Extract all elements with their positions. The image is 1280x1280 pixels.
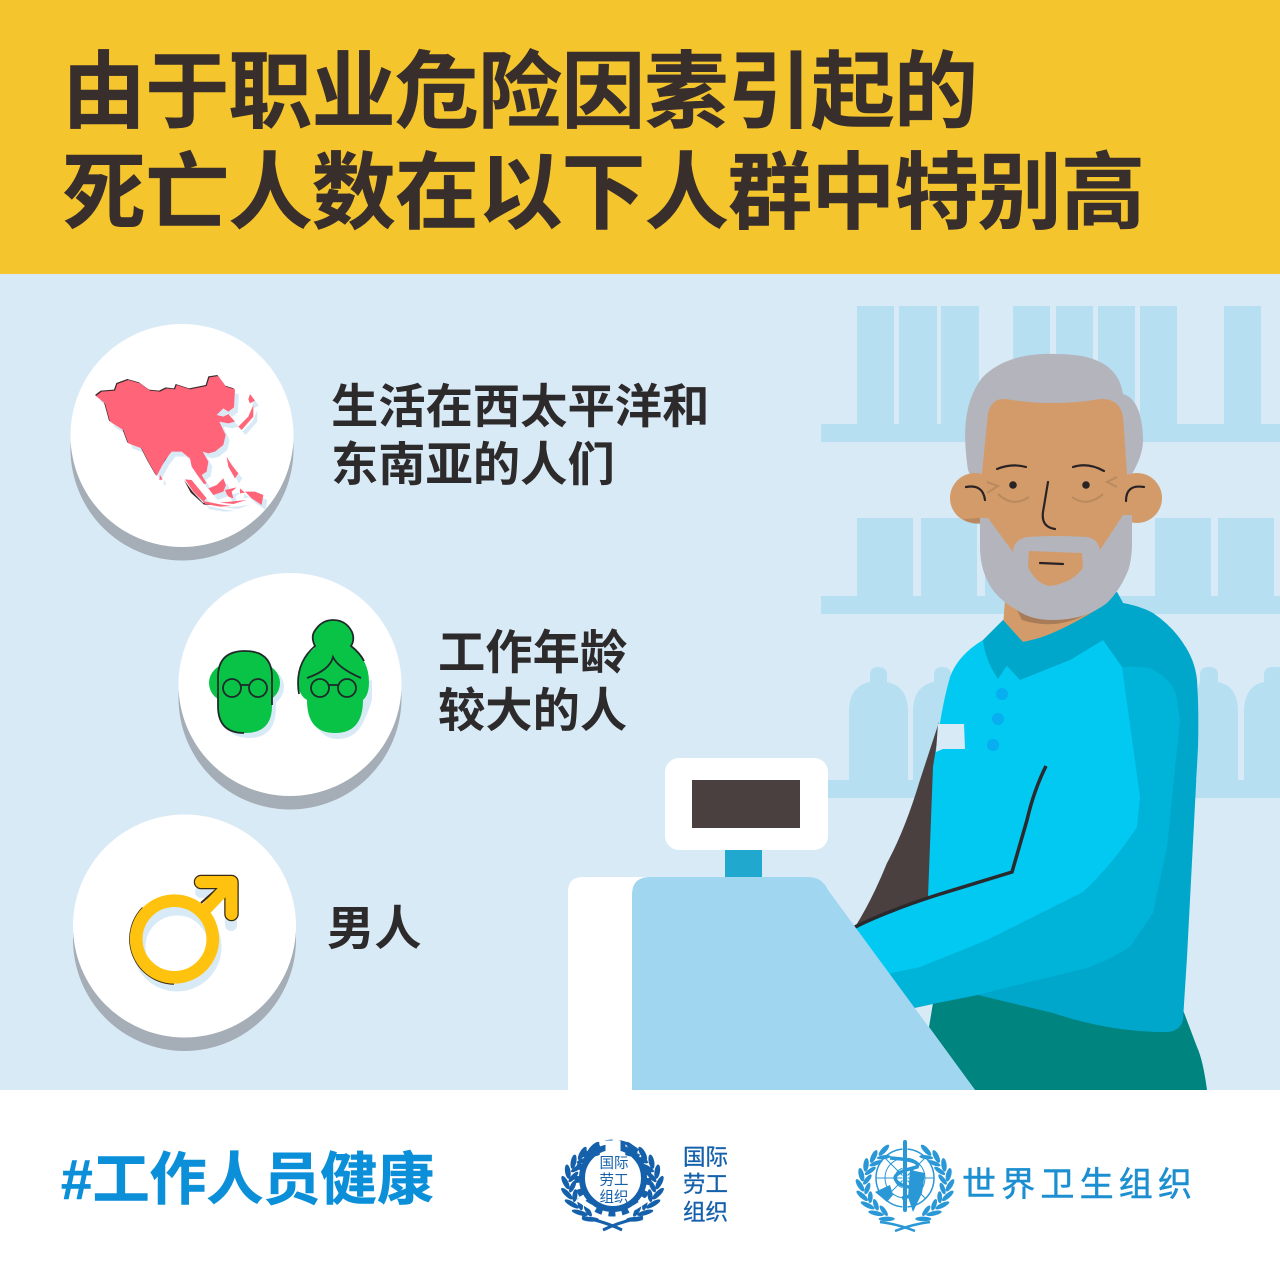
dark gap under arm	[855, 722, 939, 927]
text: older working age people: 较大的人	[438, 685, 627, 738]
WHO globe and staff	[875, 1142, 934, 1231]
WHO emblem	[854, 1142, 956, 1231]
circle: Asia map	[70, 324, 294, 560]
ILO emblem text: 组织	[600, 1189, 628, 1206]
register back	[568, 877, 660, 1090]
title: 由于职业危险因素引起的	[62, 45, 978, 139]
neck shadow	[1017, 610, 1093, 624]
face	[980, 399, 1132, 605]
logo: WHO	[854, 1142, 1192, 1231]
shelves in background	[821, 306, 1280, 798]
icon: older woman	[298, 620, 372, 739]
buttons	[987, 688, 1008, 751]
ILO emblem text	[600, 1155, 628, 1206]
facial lines	[966, 465, 1144, 564]
panel: light blue background	[0, 274, 1280, 1090]
ILO name	[683, 1145, 728, 1225]
WHO left wreath	[854, 1143, 895, 1221]
illustration: shopkeeper	[846, 354, 1207, 1090]
beard	[980, 515, 1132, 620]
ears	[950, 473, 1162, 524]
WHO name: 世界卫生组织	[962, 1166, 1192, 1204]
logo: ILO	[559, 1140, 728, 1230]
cash register	[568, 758, 975, 1090]
text: Western Pacific and South-East Asia: 生活在西太平洋和	[331, 381, 709, 434]
title: 死亡人数在以下人群中特别高	[62, 146, 1145, 240]
icon: older man	[209, 651, 284, 738]
ILO emblem	[559, 1140, 666, 1230]
WHO right wreath	[915, 1143, 956, 1221]
text: older working age people	[438, 627, 627, 738]
screen	[692, 780, 800, 828]
circle: men	[73, 814, 296, 1051]
icon: Asia Pacific map	[95, 375, 267, 512]
ILO gear	[577, 1142, 649, 1214]
ILO right wreath	[624, 1140, 666, 1222]
hashtag: #工作人员健康	[61, 1148, 434, 1212]
register body	[632, 877, 975, 1090]
collar right	[1019, 592, 1123, 679]
title	[62, 45, 1145, 240]
wrinkles	[987, 477, 1117, 502]
text: Western Pacific and South-East Asia	[331, 381, 709, 492]
shirt mid tone	[875, 667, 1180, 1009]
neck	[1003, 600, 1096, 642]
arm line	[855, 766, 1046, 927]
collar	[983, 620, 1023, 679]
screen frame	[665, 758, 828, 850]
eyes	[1009, 481, 1090, 489]
ILO name: 国际	[683, 1145, 728, 1170]
shirt front	[846, 640, 1140, 978]
pants	[929, 985, 1207, 1090]
icon: male symbol	[130, 882, 232, 985]
screen stem	[725, 850, 762, 877]
text: older working age people: 工作年龄	[438, 627, 627, 680]
circle: older workers	[178, 573, 402, 810]
text: Western Pacific and South-East Asia: 东南亚的人们	[331, 439, 615, 492]
ILO emblem text: 劳工	[600, 1172, 628, 1189]
ILO wreath stems	[582, 1217, 643, 1230]
name badge	[936, 724, 965, 752]
ILO left wreath	[559, 1140, 601, 1222]
text: men: 男人	[327, 903, 422, 956]
ILO emblem text: 国际	[600, 1155, 628, 1172]
ILO name: 劳工	[683, 1172, 728, 1197]
hair	[965, 354, 1143, 520]
ILO name: 组织	[683, 1200, 728, 1225]
chin patch	[1028, 551, 1083, 586]
shirt back	[880, 592, 1198, 1032]
panel: yellow title banner	[0, 0, 1280, 274]
